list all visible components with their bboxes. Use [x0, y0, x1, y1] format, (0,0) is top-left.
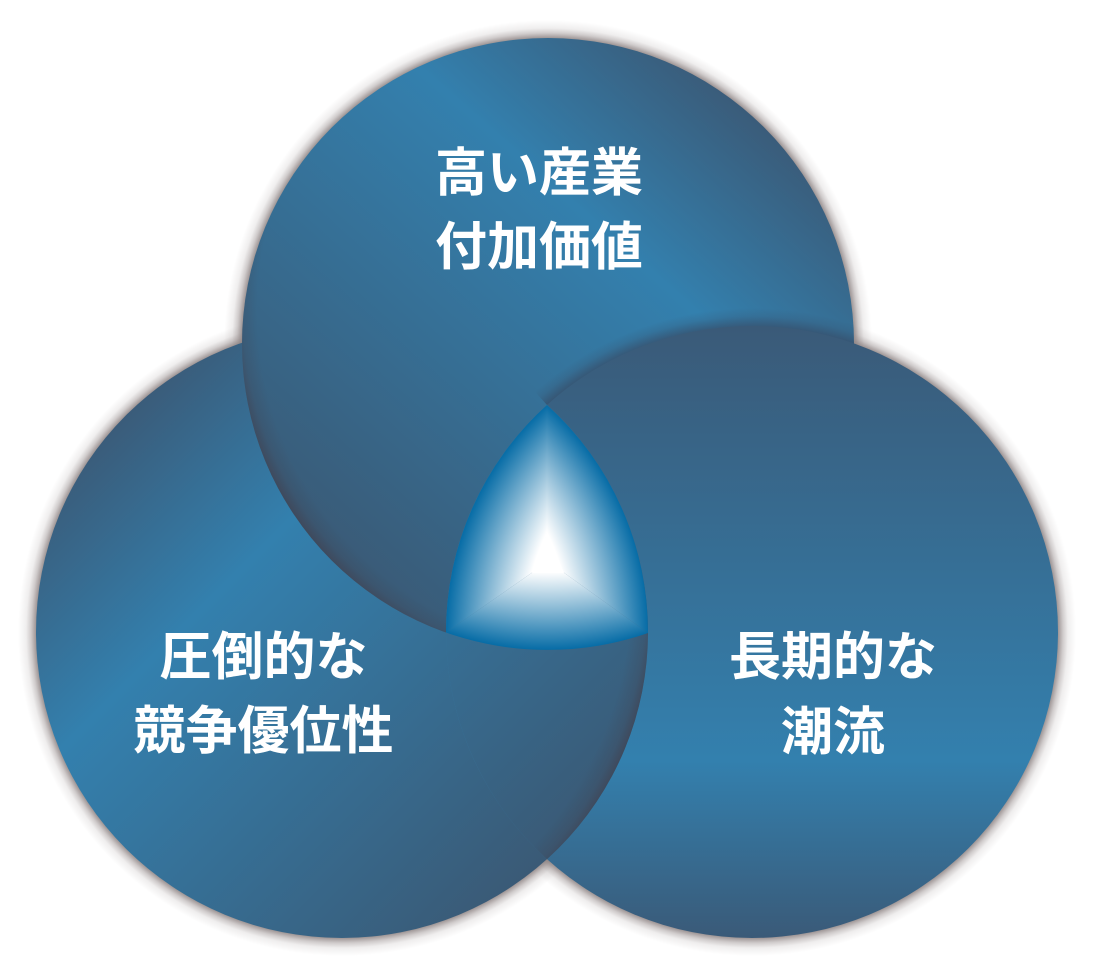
circle: long-term trend (right)	[446, 326, 1058, 938]
label: left circle	[133, 629, 394, 761]
label: right circle	[729, 629, 937, 762]
label: left circle: 競争優位性	[133, 703, 394, 761]
label: right circle: 長期的な	[729, 629, 937, 687]
label: left circle: 圧倒的な	[159, 629, 368, 687]
central glowing intersection	[446, 405, 648, 650]
shadow cast by the right circle on the top circle	[540, 314, 854, 405]
label: right circle: 潮流	[781, 704, 885, 762]
circle: competitive advantage (left)	[36, 326, 648, 938]
label: top circle: 付加価値	[435, 219, 643, 277]
overlap: left circle in front of the right circle	[446, 405, 648, 859]
circle: industry added value (top)	[242, 38, 854, 650]
label: top circle	[435, 145, 643, 277]
label: top circle: 高い産業	[435, 145, 643, 203]
